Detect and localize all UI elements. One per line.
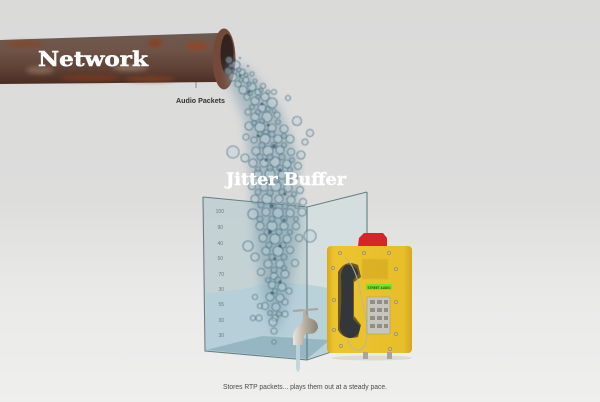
- tank scale: 90: [217, 225, 223, 231]
- tank scale: 30: [218, 287, 224, 293]
- keypad: [367, 297, 390, 334]
- tank scale: 55: [218, 302, 224, 308]
- tank scale: 100: [216, 209, 224, 215]
- caption: Stores RTP packets... plays them out at a steady pace.: [223, 384, 387, 391]
- tank scale: 40: [217, 241, 223, 247]
- heading: Jitter Buffer: Jitter Buffer: [224, 170, 346, 189]
- speaker grille: [362, 259, 388, 279]
- heading: Network: Network: [38, 47, 149, 71]
- yellow emergency telephone: STREET AUDIO: [368, 285, 390, 290]
- tank scale: 50: [217, 256, 223, 262]
- pipe: [0, 28, 236, 90]
- small bubbles layer: [229, 64, 300, 316]
- tank scale: 70: [218, 272, 224, 278]
- handset recess: [338, 263, 361, 338]
- green display: [366, 284, 392, 290]
- tank scale: 30: [218, 318, 224, 324]
- yellow emergency telephone: [327, 233, 412, 360]
- phone screws: [331, 251, 398, 351]
- dark bubble detail: [230, 57, 286, 294]
- red beacon: [358, 233, 387, 246]
- faucet: [293, 309, 318, 372]
- bubbles stream: [225, 57, 316, 344]
- tank scale: [216, 209, 224, 339]
- handset cord: [345, 258, 367, 350]
- label: Audio Packets: [176, 82, 225, 105]
- handset: [340, 265, 360, 338]
- label: Audio Packets: Audio Packets: [176, 98, 225, 105]
- stream body shading: [228, 62, 298, 335]
- tank scale: 30: [218, 333, 224, 339]
- glass tank: [203, 192, 367, 360]
